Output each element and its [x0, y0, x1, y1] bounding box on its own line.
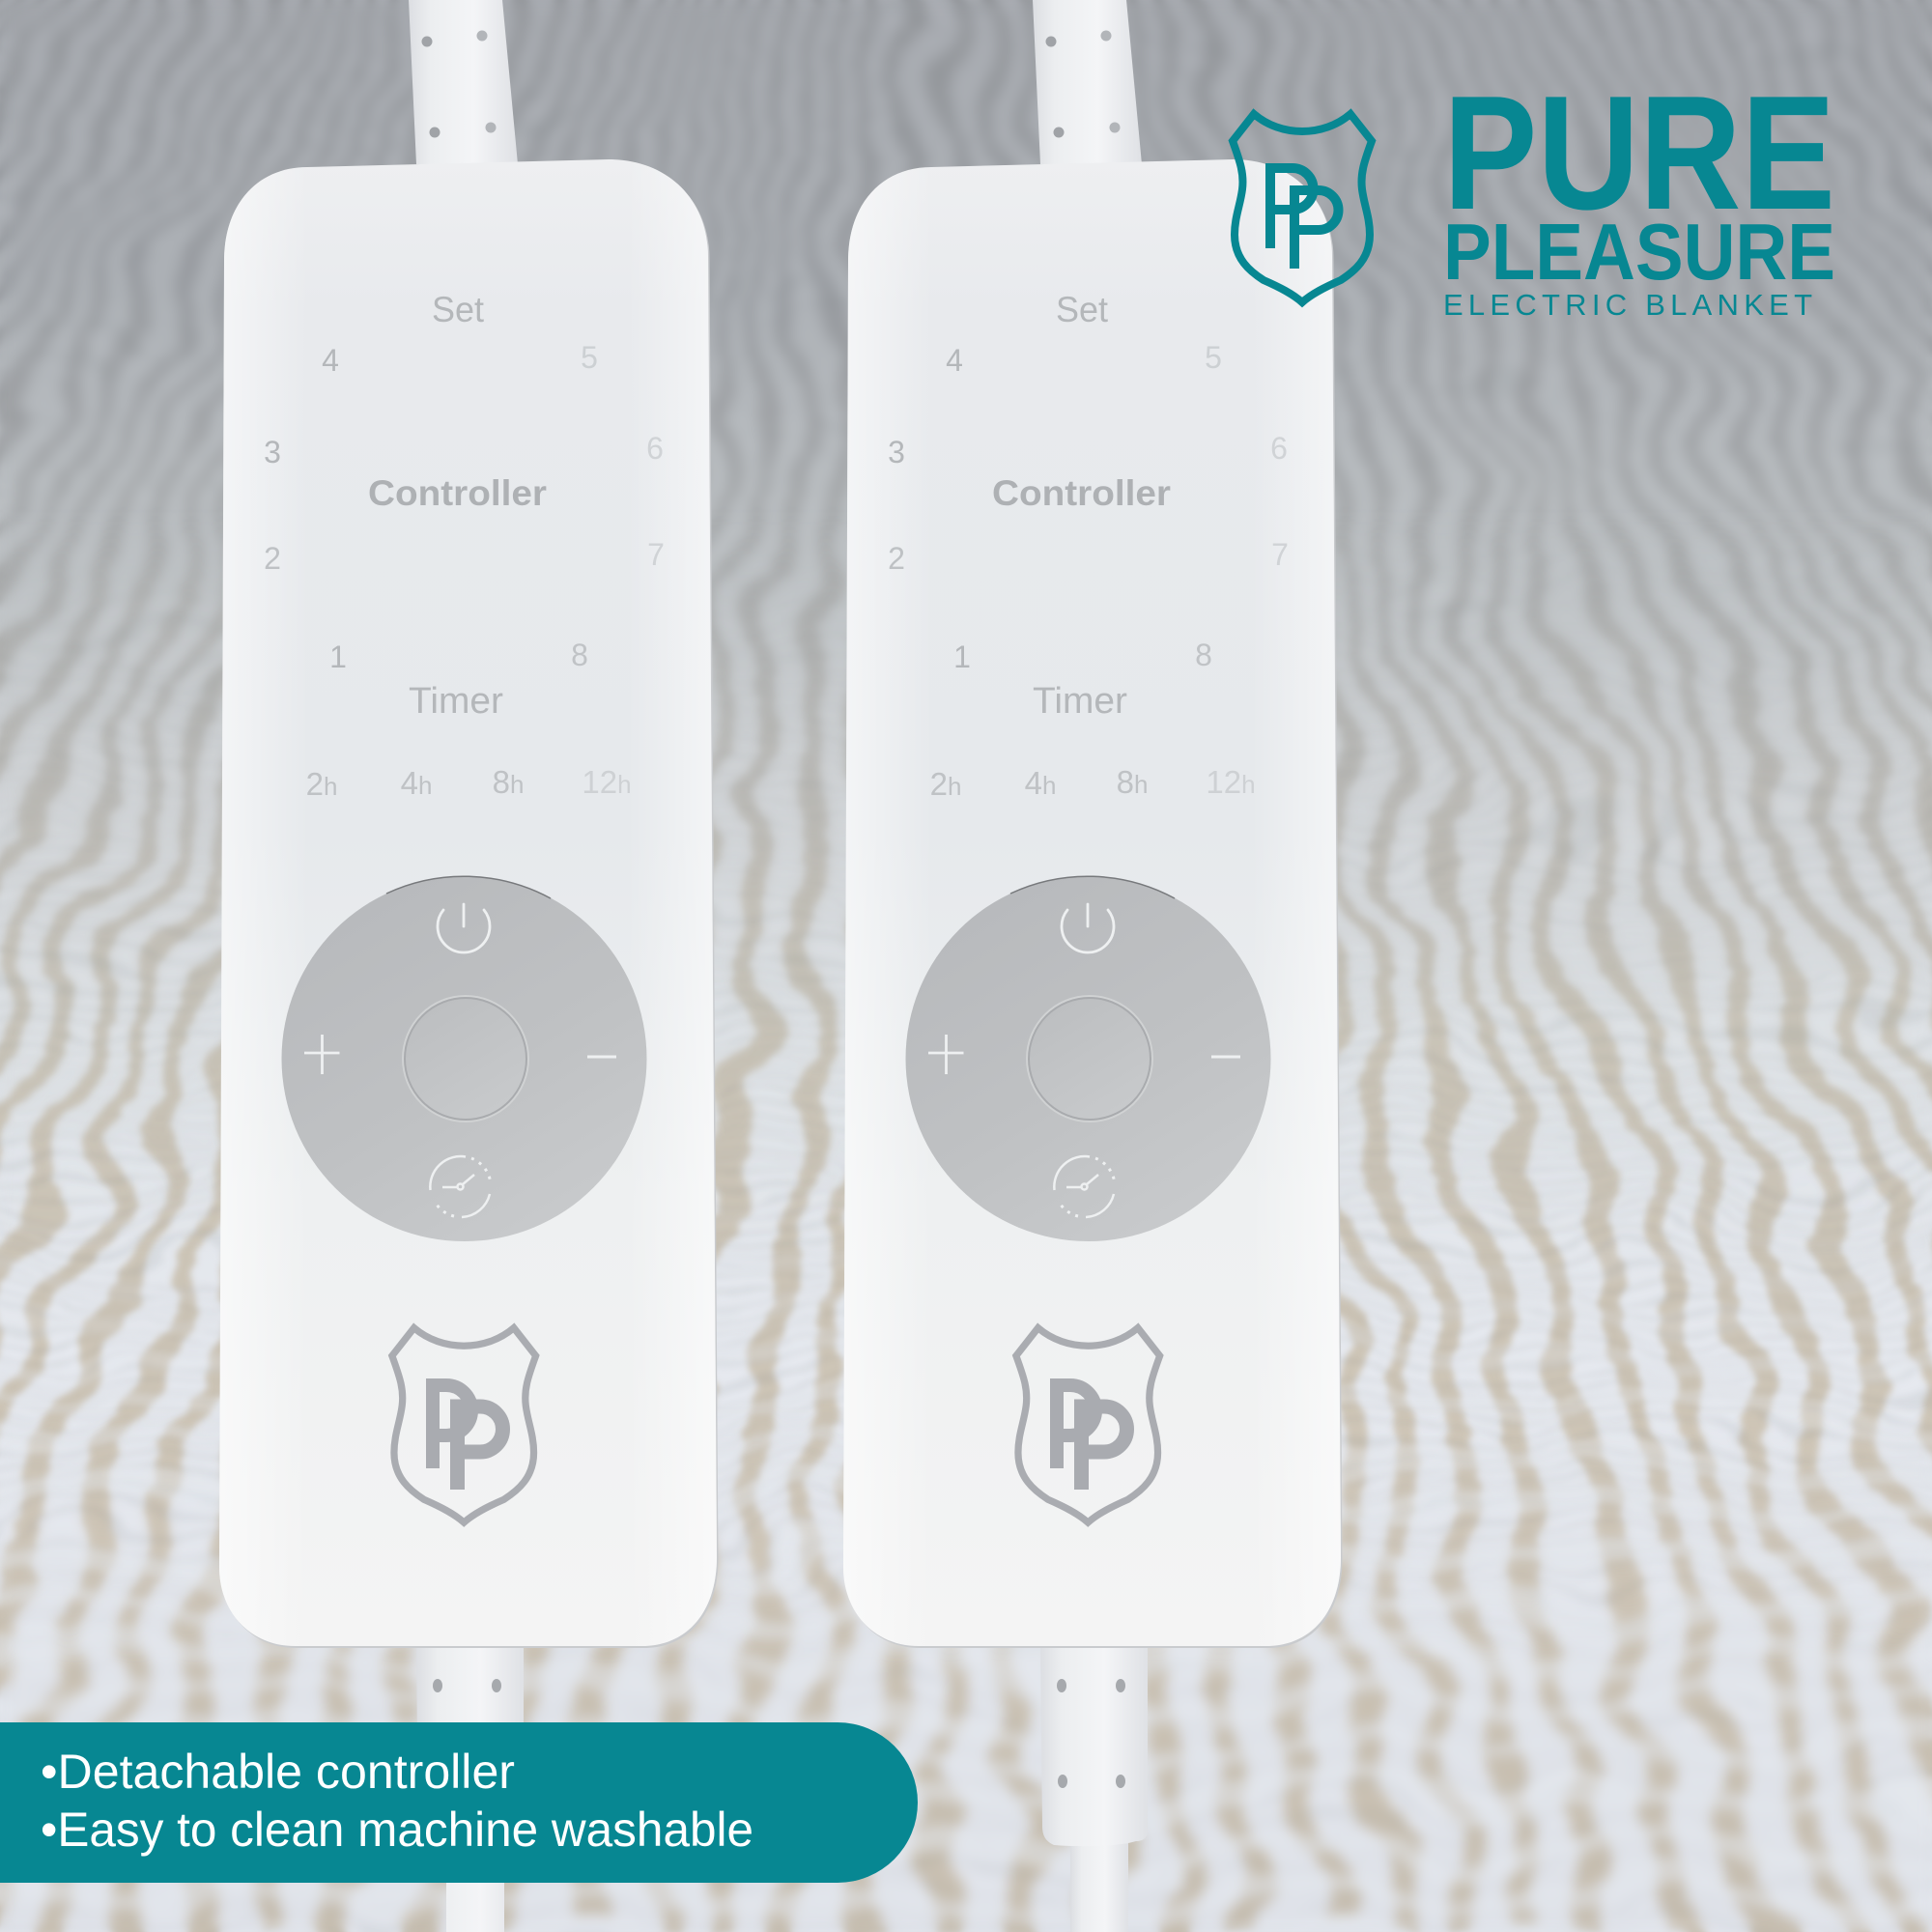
printed labels left: 1	[329, 639, 347, 674]
printed labels left: 2h	[306, 766, 337, 802]
icon: minus	[587, 1055, 616, 1059]
icon: plus	[928, 1035, 964, 1074]
control dial left	[282, 876, 647, 1241]
printed labels right: 5	[1205, 340, 1222, 375]
printed labels left: 6	[646, 431, 664, 466]
printed labels right: Controller	[992, 473, 1171, 513]
printed labels right: 4h	[1025, 765, 1056, 801]
printed labels right: Timer	[1033, 681, 1127, 722]
printed labels right: 6	[1270, 431, 1288, 466]
printed labels right: 7	[1271, 537, 1289, 572]
printed labels left: Timer	[409, 681, 503, 722]
printed labels left: 3	[264, 435, 281, 469]
printed labels right: 3	[888, 435, 905, 469]
printed labels left: 7	[647, 537, 665, 572]
printed labels right: 12h	[1206, 764, 1256, 800]
icon: timer clock	[430, 1156, 491, 1217]
brand logo	[1233, 62, 1835, 322]
cord bottom left	[416, 1642, 524, 1932]
printed labels right: 8h	[1117, 764, 1148, 800]
icon: power	[1062, 904, 1114, 952]
right controller	[843, 0, 1343, 1932]
printed labels right	[888, 290, 1289, 802]
logo tagline: ELECTRIC BLANKET	[1443, 288, 1812, 322]
cord bottom right	[1040, 1642, 1148, 1932]
printed labels left: 8	[571, 638, 588, 672]
brand shield right	[1016, 1328, 1160, 1522]
logo wordmark PLEASURE: PLEASURE	[1443, 207, 1835, 297]
icon: power	[438, 904, 490, 952]
printed labels left: 2	[264, 541, 281, 576]
printed labels right: 2h	[930, 766, 961, 802]
control dial right	[906, 876, 1271, 1241]
printed labels left: 12h	[582, 764, 632, 800]
controller body right	[843, 159, 1343, 1648]
icon: minus	[1211, 1055, 1240, 1059]
printed labels left: 8h	[493, 764, 524, 800]
controller body left	[219, 159, 719, 1648]
logo wordmark PURE: PURE	[1443, 62, 1835, 243]
printed labels left: 5	[581, 340, 598, 375]
feature text: washable: •Easy to clean machine washable	[41, 1803, 753, 1857]
logo shield	[1233, 114, 1372, 302]
cord top right	[1033, 0, 1142, 164]
printed labels left: Controller	[368, 473, 547, 513]
printed labels right: 2	[888, 541, 905, 576]
printed labels right: 8	[1195, 638, 1212, 672]
feature text: detachable: •Detachable controller	[41, 1745, 515, 1799]
printed labels right: 1	[953, 639, 971, 674]
feature callout pill	[0, 1722, 918, 1883]
printed labels left: Set	[432, 290, 485, 329]
printed labels left: 4	[322, 343, 339, 378]
icon: timer clock	[1054, 1156, 1115, 1217]
printed labels right: Set	[1056, 290, 1109, 329]
brand shield left	[392, 1328, 536, 1522]
cord top left	[409, 0, 518, 164]
left controller	[219, 0, 719, 1932]
printed labels right: 4	[946, 343, 963, 378]
printed labels left: 4h	[401, 765, 432, 801]
printed labels left	[264, 290, 665, 802]
icon: plus	[304, 1035, 340, 1074]
